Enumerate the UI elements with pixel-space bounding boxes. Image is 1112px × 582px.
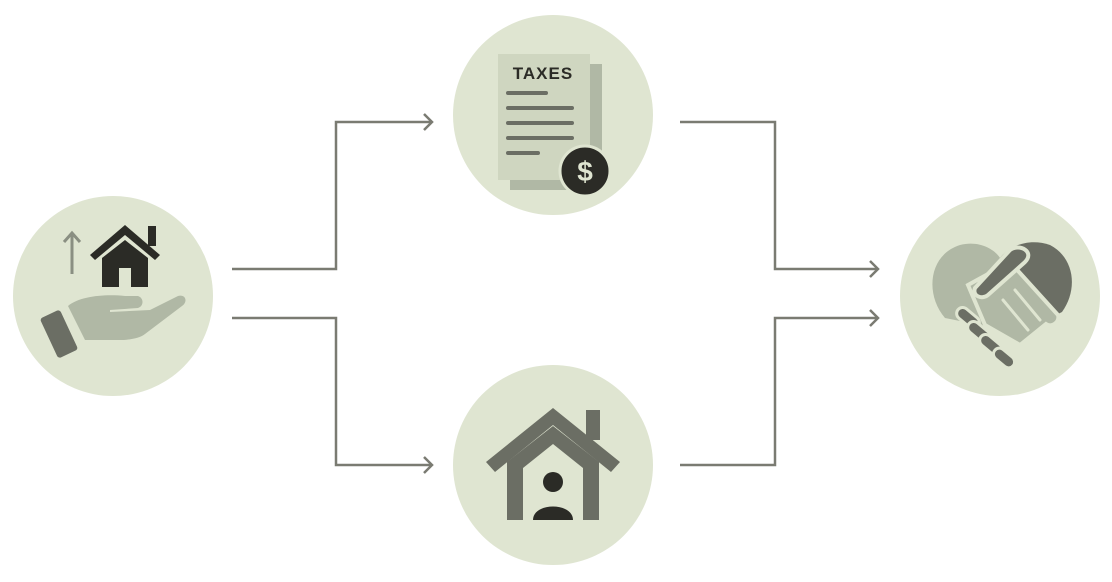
connector arrows xyxy=(232,114,878,473)
hand xyxy=(68,295,185,340)
arrow up xyxy=(64,233,80,274)
icon: taxes document: $ xyxy=(577,156,593,187)
icon: handshake heart (result) xyxy=(900,196,1100,396)
icon: taxes document xyxy=(453,15,653,215)
house xyxy=(90,225,160,287)
icon: taxes document: TAXES xyxy=(513,64,573,83)
icon: house with person xyxy=(453,365,653,565)
icon: hand holding house (start) xyxy=(13,196,213,396)
